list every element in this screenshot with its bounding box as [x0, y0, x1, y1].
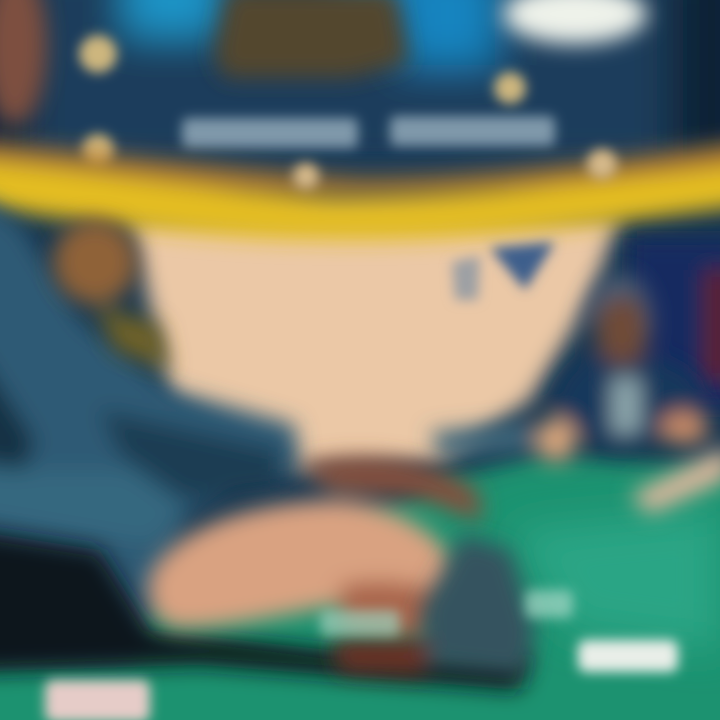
- sign text: blurred lettering: [182, 116, 555, 148]
- yellow banner: [0, 140, 720, 240]
- peach wall: [130, 215, 620, 470]
- poker chips: [330, 535, 535, 675]
- marquee lights: [79, 35, 526, 166]
- lights on banner: [293, 149, 617, 189]
- foreground shadow: [0, 530, 530, 690]
- backdrop: dark stage sign: [0, 0, 720, 170]
- moon light: [503, 0, 647, 44]
- foreground man: jacket: [0, 190, 300, 660]
- playing cards: [45, 590, 678, 720]
- right background figure area: [625, 238, 720, 410]
- wall blue patch: [452, 242, 555, 300]
- hand and forearm: [148, 457, 482, 640]
- sign panel: brown emblem: [214, 0, 408, 78]
- man's head: [0, 0, 170, 370]
- table highlight: [510, 510, 720, 650]
- green table: [0, 455, 720, 720]
- background player: [430, 275, 720, 514]
